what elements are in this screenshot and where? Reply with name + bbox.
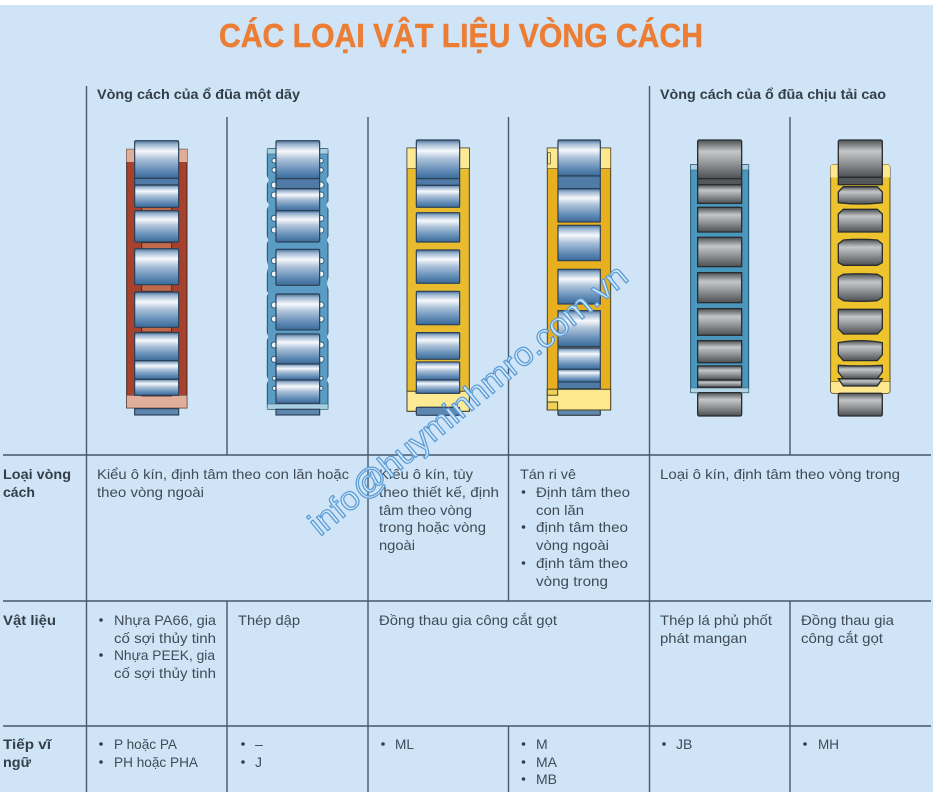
suffix: M, MA, MB: MB	[536, 771, 557, 787]
bearing 5: phosphated sheet steel cage JB	[691, 140, 749, 416]
suffix: ML: ML	[395, 736, 414, 752]
cage type: single-row polymer and steel	[97, 466, 349, 500]
suffix: P, PH: P hoặc PA	[114, 736, 178, 752]
suffix: dash, J	[241, 736, 263, 770]
material: phosphated steel: phát mangan	[660, 630, 747, 646]
cage type: single-row polymer and steel: Kiểu ô kín, định tâm theo con lăn hoặc	[97, 466, 349, 482]
suffix: M, MA, MB	[522, 736, 558, 787]
row label: cage type	[3, 466, 71, 500]
suffix: dash, J: –	[255, 736, 263, 752]
cage type: riveted list: Định tâm theo	[536, 484, 630, 500]
material: polymer list: cố sợi thủy tinh	[114, 630, 216, 646]
cage type: riveted list: vòng trong	[536, 573, 608, 589]
cage type: high-load: Loại ô kín, định tâm theo vòng trong	[660, 466, 900, 482]
bearing 1: red polymer cage	[127, 141, 187, 415]
material: machined brass high-load: công cắt gọt	[801, 630, 883, 646]
cage type: riveted list: Tán ri vê	[520, 466, 576, 482]
cage type: machined brass: trong hoặc vòng	[379, 519, 486, 535]
suffix: JB	[662, 736, 692, 752]
cage type: riveted list: định tâm theo	[536, 519, 628, 535]
cage type: single-row polymer and steel: theo vòng ngoài	[97, 484, 204, 500]
bearing 2: stamped steel cage	[266, 141, 329, 415]
material: phosphated steel: Thép lá phủ phốt	[660, 612, 772, 628]
suffix: JB: JB	[676, 736, 692, 752]
bearing 4: riveted brass cage M	[547, 140, 611, 415]
suffix: MH: MH	[818, 736, 839, 752]
material: stamped steel: Thép dập	[238, 612, 300, 628]
heading: high-load cages: Vòng cách của ổ đũa chịu tải cao	[660, 86, 886, 102]
suffix: P, PH	[99, 736, 199, 770]
title: CÁC LOẠI VẬT LIỆU VÒNG CÁCH	[219, 17, 703, 54]
cage type: machined brass: tâm theo vòng	[379, 502, 472, 518]
cage type: riveted list: định tâm theo	[536, 555, 628, 571]
suffix: MH	[803, 736, 839, 752]
row label: cage type: Loại vòng	[3, 466, 71, 482]
material: machined brass high-load	[801, 612, 894, 646]
row label: suffix: ngữ	[3, 754, 32, 770]
suffix: ML	[381, 736, 414, 752]
cage type: machined brass	[379, 466, 499, 553]
watermark: info@huyminhmro.com.vn	[301, 256, 635, 542]
material: phosphated steel	[660, 612, 772, 646]
material: machined brass high-load: Đồng thau gia	[801, 612, 894, 628]
cage type: machined brass: ngoài	[379, 537, 415, 553]
material: polymer list: Nhựa PEEK, gia	[114, 647, 215, 663]
cage type: riveted list	[520, 466, 630, 589]
cage type: machined brass: Kiểu ô kín, tùy	[379, 466, 473, 482]
bearing 3: machined brass cage ML	[407, 140, 469, 415]
suffix: P, PH: PH hoặc PHA	[114, 754, 199, 770]
material: polymer list: cố sợi thủy tinh	[114, 665, 216, 681]
row label: cage type: cách	[3, 484, 35, 500]
suffix: M, MA, MB: MA	[536, 754, 558, 770]
material: polymer list	[99, 612, 216, 681]
row label: material: Vật liệu	[3, 612, 56, 628]
heading: single-row cages: Vòng cách của ổ đũa một dãy	[97, 86, 300, 102]
cage type: riveted list: con lăn	[536, 502, 584, 518]
material: machined brass: Đồng thau gia công cắt gọt	[379, 612, 557, 628]
row label: suffix: Tiếp vĩ	[3, 736, 52, 752]
cage type: machined brass: theo thiết kế, định	[379, 484, 499, 500]
material: polymer list: Nhựa PA66, gia	[114, 612, 216, 628]
row label: suffix	[3, 736, 52, 770]
suffix: M, MA, MB: M	[536, 736, 548, 752]
bearing 6: machined brass cage MH	[831, 140, 890, 416]
suffix: dash, J: J	[255, 754, 262, 770]
cage type: riveted list: vòng ngoài	[536, 537, 609, 553]
